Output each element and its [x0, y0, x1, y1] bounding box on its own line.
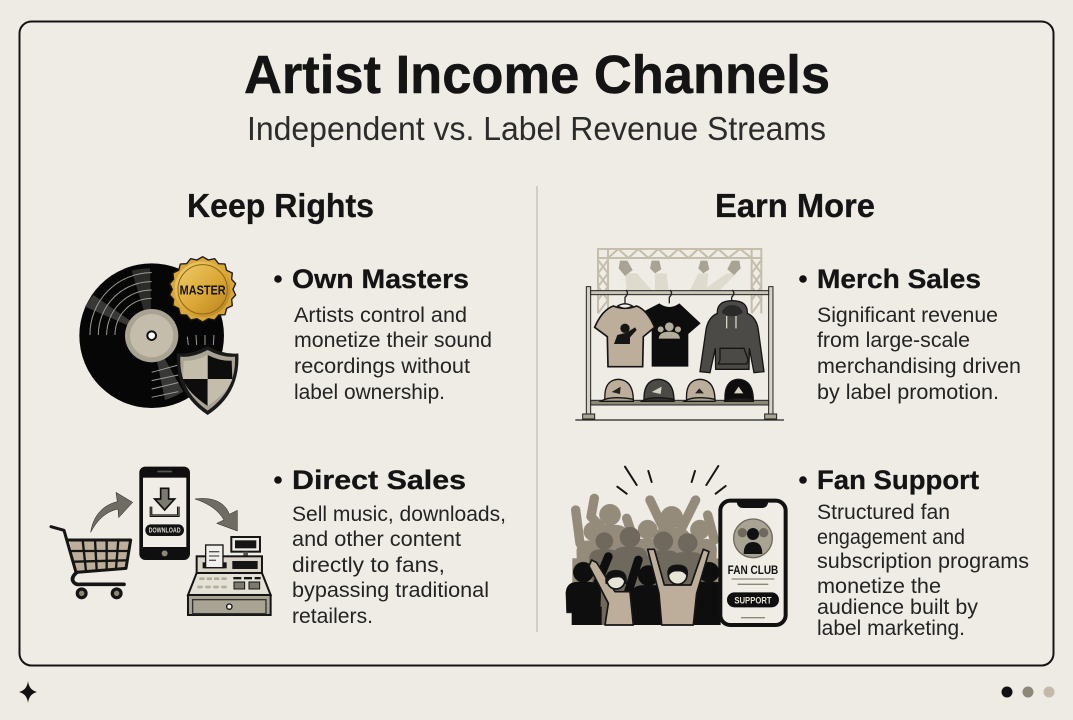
subtitle: Independent vs. Label Revenue Streams [247, 110, 826, 147]
text: Fan Support description: Structured fan [817, 501, 950, 524]
text: Fan Support description: engagement and [817, 526, 965, 549]
icon: cheering crowd and fan club phone [566, 466, 786, 625]
bullet: Fan Support [799, 476, 807, 484]
text: Own Masters description: monetize their sound [294, 329, 492, 352]
stage truss [598, 249, 761, 313]
icon: merch rack with stage truss [575, 249, 784, 420]
shopping cart [51, 527, 131, 599]
front silhouettes [566, 557, 726, 625]
text: Merch Sales description: merchandising driven [817, 355, 1021, 378]
bullet: Own Masters [274, 275, 282, 283]
text: Direct Sales description: bypassing traditional [292, 579, 489, 602]
cheer lines [617, 466, 726, 494]
phone with download: DOWNLOAD [149, 527, 181, 534]
phone: fan club: FAN CLUB [728, 563, 779, 577]
row of caps [601, 379, 753, 401]
text: Merch Sales description: Significant revenue [817, 304, 998, 327]
phone with download [139, 467, 190, 560]
front fan center [648, 549, 709, 625]
text: Fan Support description: audience built by [817, 596, 978, 619]
arrow: phone to register [195, 498, 237, 531]
heading: Earn More: Earn More [715, 187, 875, 224]
text: Direct Sales description: Sell music, downloads, [292, 503, 506, 526]
icon: sparkle [19, 681, 37, 703]
gold MASTER badge: MASTER [180, 283, 226, 298]
grey hoodie [700, 290, 764, 373]
text: Own Masters description: label ownership. [294, 381, 445, 404]
text: Direct Sales description: retailers. [292, 605, 373, 628]
text: Merch Sales description: from large-scale [817, 329, 970, 352]
phone: fan club: SUPPORT [734, 595, 772, 605]
text: Fan Support description [817, 501, 1029, 640]
tan t-shirt [595, 290, 655, 367]
gold MASTER badge [170, 257, 236, 322]
bullet: Direct Sales [274, 476, 282, 484]
text: Fan Support description: subscription programs [817, 550, 1029, 573]
clothes rack [575, 287, 784, 420]
text: Merch Sales description [817, 304, 1021, 404]
heading: Merch Sales: Merch Sales [817, 264, 981, 294]
text: Fan Support description: label marketing. [817, 617, 965, 640]
bullet: Merch Sales [799, 275, 807, 283]
front fan left [589, 560, 633, 625]
back row of crowd [572, 498, 719, 625]
text: Own Masters description: Artists control and [294, 304, 467, 327]
shield [177, 346, 238, 415]
pagination dots [1002, 686, 1054, 698]
icon: vinyl record with master badge and shield [79, 257, 238, 415]
text: Own Masters description: recordings without [294, 355, 470, 378]
black t-shirt [643, 290, 701, 367]
icon: cart, phone download and cash register [51, 467, 271, 615]
text: Own Masters description [294, 304, 492, 404]
heading: Own Masters: Own Masters [292, 264, 469, 294]
text: Direct Sales description: directly to fans, [292, 554, 445, 577]
middle row of crowd [589, 527, 705, 625]
heading: Fan Support: Fan Support [817, 465, 979, 495]
title: Artist Income Channels [244, 45, 830, 105]
text: Direct Sales description [292, 503, 506, 628]
cash register [188, 537, 271, 615]
heading: Keep Rights: Keep Rights [187, 187, 374, 224]
arrow: cart to phone [91, 492, 133, 532]
text: Merch Sales description: by label promotion. [817, 381, 999, 404]
heading: Direct Sales: Direct Sales [292, 465, 466, 495]
text: Direct Sales description: and other content [292, 528, 461, 551]
text: Fan Support description: monetize the [817, 575, 941, 598]
phone: fan club [720, 501, 786, 625]
